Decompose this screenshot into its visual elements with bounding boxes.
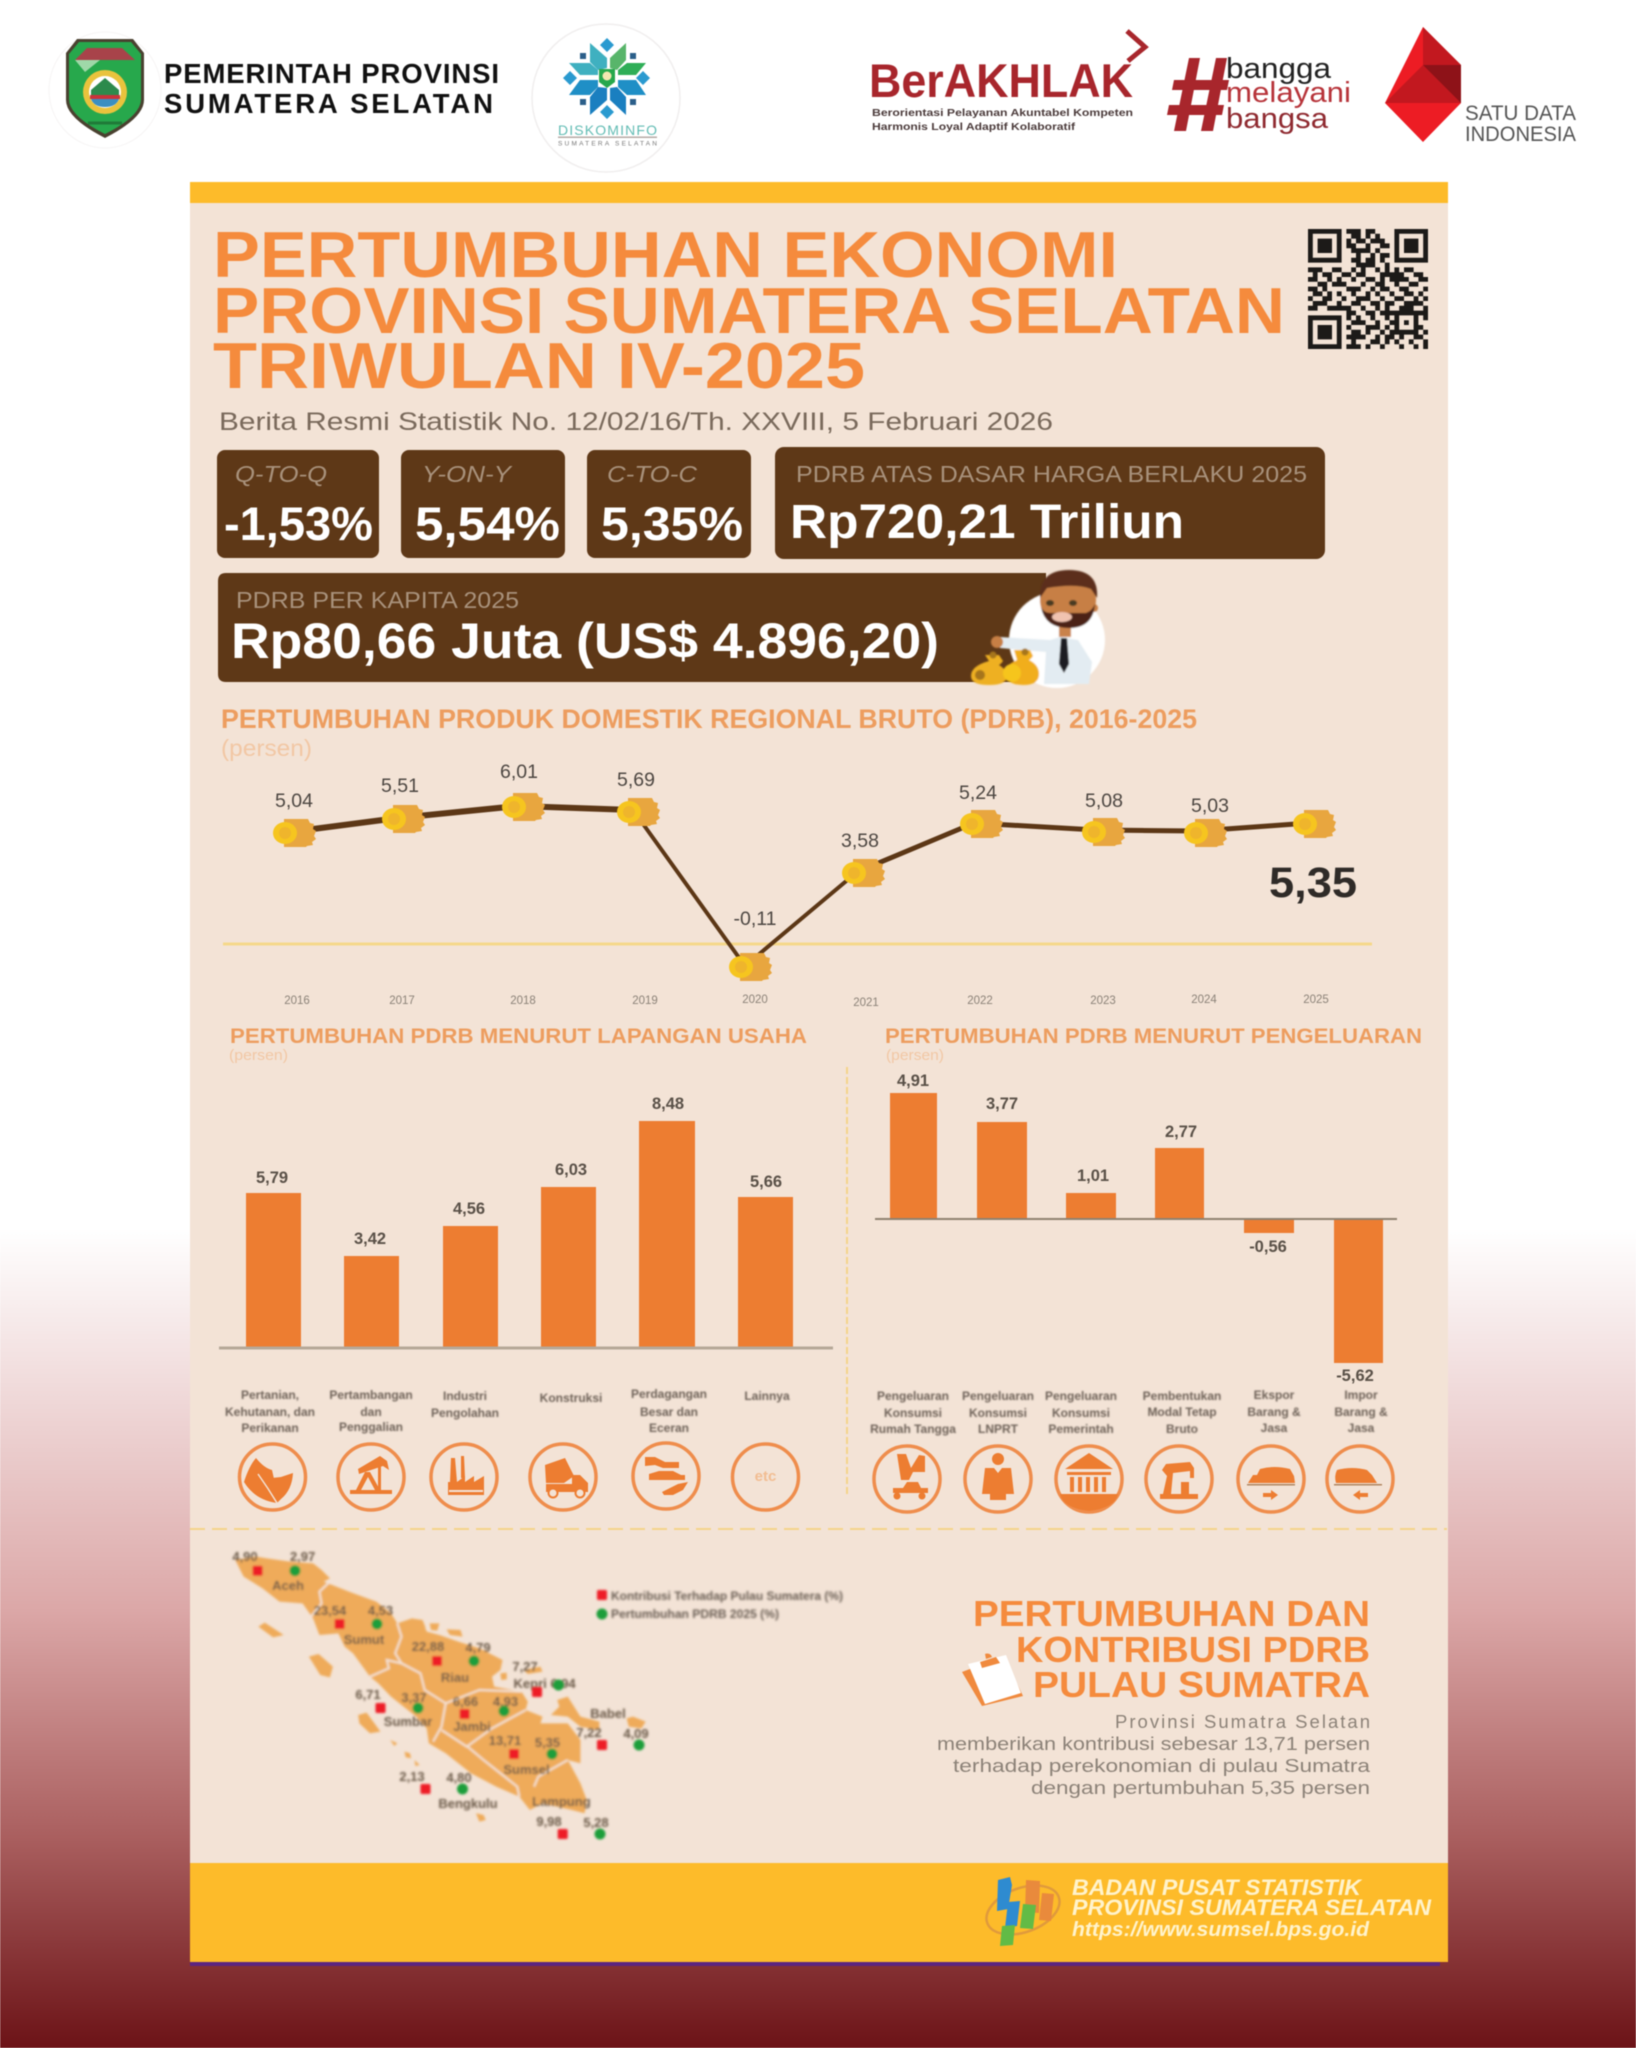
category labels: dan [360, 1405, 382, 1419]
contribution and growth values: 23,54 [314, 1603, 347, 1618]
contribution and growth values: 4,53 [368, 1603, 393, 1618]
logo: BerAKHLAK: BerAKHLAK [869, 54, 1133, 107]
bar value labels: 1,01 [1077, 1167, 1109, 1185]
contribution and growth values: 2,97 [290, 1549, 315, 1564]
bar value labels: 4,56 [453, 1200, 485, 1218]
icon: hands and car [633, 1443, 699, 1509]
logo: bangga melayani bangsa: melayani [1226, 77, 1351, 109]
category labels: Pertambangan [329, 1388, 413, 1402]
logo: Diskominfo: DISKOMINFO [558, 122, 657, 138]
bars [246, 1121, 793, 1348]
paragraph: Sumatra contribution [937, 1711, 1371, 1798]
category labels: Rumah Tangga [870, 1422, 956, 1436]
bar value labels: 2,77 [1165, 1123, 1197, 1141]
bar value labels: -0,56 [1249, 1238, 1287, 1256]
data labels: 5,04 [275, 790, 313, 812]
category labels: Konsumsi [1052, 1406, 1110, 1420]
icon: etc [732, 1444, 798, 1510]
category labels: Pengeluaran [1045, 1389, 1117, 1403]
logo: bangga melayani bangsa: bangsa [1226, 103, 1329, 135]
bar value labels: 8,48 [652, 1095, 684, 1113]
category labels: Ekspor [1254, 1388, 1295, 1402]
agency name [164, 58, 499, 119]
year axis labels: 2022 [967, 995, 993, 1007]
province names [272, 1578, 626, 1811]
year axis labels: 2021 [853, 997, 879, 1009]
stat card: C-to-C [587, 450, 751, 558]
stat card: Y-on-Y: 5,54% [415, 497, 560, 550]
legend: Pertumbuhan PDRB 2025 (%) [611, 1609, 779, 1621]
title: PROVINSI SUMATERA SELATAN [213, 274, 1285, 347]
infographic panel [190, 182, 1448, 1962]
bar value labels: 5,79 [256, 1169, 288, 1187]
contribution and growth values: 6,66 [453, 1694, 478, 1709]
stat card: Q-to-Q: -1,53% [224, 497, 373, 550]
title: TRIWULAN IV-2025 [213, 329, 865, 402]
icon: export ship [1238, 1446, 1304, 1512]
province names: Bengkulu [438, 1796, 498, 1811]
zero baseline [223, 942, 1372, 946]
horizontal divider [190, 1528, 1447, 1530]
unit label: (persen) [229, 1048, 288, 1064]
organisation text: BADAN PUSAT STATISTIK [1072, 1875, 1363, 1900]
category labels: Eceran [649, 1421, 689, 1435]
heading: Sumatra contribution: PERTUMBUHAN DAN [973, 1593, 1370, 1634]
icon: factory [431, 1444, 497, 1510]
heading: Sumatra contribution [973, 1593, 1370, 1705]
category labels: Bruto [1166, 1422, 1198, 1436]
stat card: Y-on-Y: Y-ON-Y [422, 461, 513, 487]
paragraph: Sumatra contribution: dengan pertumbuhan 5,35 persen [1031, 1777, 1370, 1798]
bar value labels: 4,91 [897, 1072, 929, 1090]
category labels: Barang & [1247, 1405, 1301, 1419]
stat card: PDRB ADHB: Rp720,21 Triliun [790, 496, 1184, 549]
stat card: PDRB ADHB: PDRB ATAS DASAR HARGA BERLAKU 2025 [796, 461, 1307, 487]
unit label: (persen) [221, 735, 312, 761]
category labels: Konsumsi [884, 1406, 942, 1420]
contribution and growth values: 4,80 [446, 1770, 472, 1785]
province names: Sumsel [503, 1762, 550, 1777]
icon: clipboard [962, 1653, 1023, 1706]
logo: Satu Data Indonesia: INDONESIA [1465, 123, 1576, 146]
stat card: C-to-C: 5,35% [601, 497, 743, 550]
bar value labels [256, 1095, 782, 1248]
year axis labels: 2020 [742, 994, 768, 1006]
year axis labels: 2016 [284, 995, 310, 1007]
category labels: Pembentukan [1143, 1389, 1221, 1403]
provinces landmass [235, 1557, 646, 1822]
bars [890, 1093, 1383, 1363]
data labels: 5,03 [1191, 795, 1229, 817]
province names: Kepri 6,94 [514, 1676, 576, 1691]
category labels [870, 1388, 1388, 1436]
paragraph: Sumatra contribution: memberikan kontribusi sebesar 13,71 persen [937, 1733, 1370, 1754]
bar value labels: 5,66 [750, 1173, 782, 1191]
data labels: 5,69 [617, 769, 655, 791]
year axis labels: 2023 [1090, 995, 1116, 1007]
data labels: 3,58 [841, 830, 879, 852]
logo: Satu Data Indonesia: SATU DATA [1465, 102, 1576, 125]
stat card: Q-to-Q: Q-TO-Q [235, 461, 327, 487]
category labels: Konsumsi [969, 1406, 1027, 1420]
section: growth by expenditure [870, 1025, 1422, 1512]
category labels: Konstruksi [540, 1391, 602, 1405]
year axis labels: 2025 [1303, 994, 1329, 1006]
icon: oil pump [338, 1444, 404, 1510]
icon: leaves [240, 1444, 306, 1510]
logo: BPS [980, 1876, 1066, 1946]
paragraph: Sumatra contribution: Provinsi Sumatra Selatan [1115, 1711, 1370, 1732]
contribution markers [253, 1566, 607, 1839]
stat card: PDRB per capita: PDRB PER KAPITA 2025 [236, 587, 519, 613]
heading: Sumatra contribution: KONTRIBUSI PDRB [1016, 1629, 1370, 1670]
logo: Pemerintah Provinsi Sumatera Selatan [49, 32, 161, 148]
category labels: Perdagangan [631, 1387, 707, 1401]
contribution and growth values: 5,35 [535, 1735, 560, 1750]
year axis labels: 2018 [510, 995, 536, 1007]
province names: Sumut [344, 1632, 385, 1647]
contribution and growth values: 3,37 [401, 1690, 427, 1705]
title [213, 218, 1285, 402]
contribution and growth values: 7,27 [512, 1659, 538, 1674]
contribution and growth values: 4,09 [623, 1726, 649, 1741]
category labels [225, 1387, 790, 1435]
category labels: Kehutanan, dan [225, 1405, 315, 1419]
unit label: (persen) [886, 1048, 944, 1064]
category labels: Perikanan [241, 1421, 299, 1435]
organisation text [1072, 1875, 1432, 1941]
province names: Jambi [453, 1719, 491, 1734]
stat card: PDRB ADHB [775, 447, 1325, 559]
paragraph: Sumatra contribution: terhadap perekonomian di pulau Sumatra [953, 1755, 1371, 1776]
icon: cement truck [530, 1444, 596, 1510]
contribution and growth values: 13,71 [489, 1733, 521, 1748]
bar value labels: 3,77 [986, 1095, 1018, 1113]
map of Sumatra [232, 1549, 843, 1840]
data labels [275, 761, 1357, 930]
subtitle: release reference: Berita Resmi Statistik No. 12/02/16/Th. XXVIII, 5 Februari 2026 [219, 408, 1053, 436]
province names: Aceh [272, 1578, 304, 1593]
QR code [1308, 229, 1428, 349]
category labels: Impor [1344, 1388, 1378, 1402]
category labels: Lainnya [744, 1389, 790, 1403]
year axis labels: 2019 [632, 995, 658, 1007]
logo: BerAKHLAK: Harmonis Loyal Adaptif Kolaboratif [872, 122, 1076, 133]
icon: person [965, 1446, 1031, 1512]
coin markers [273, 793, 1336, 981]
year axis labels: 2024 [1191, 994, 1217, 1006]
logo: BerAKHLAK [869, 31, 1145, 133]
legend: Kontribusi Terhadap Pulau Sumatera (%) [611, 1591, 843, 1603]
contribution and growth values [232, 1549, 649, 1830]
contribution and growth values: 2,13 [399, 1769, 425, 1784]
stat card: Q-to-Q [217, 450, 379, 558]
footer band [190, 1863, 1448, 1962]
category labels: Barang & [1334, 1405, 1388, 1419]
data labels: 5,51 [381, 775, 419, 797]
title: PERTUMBUHAN EKONOMI [213, 218, 1118, 291]
icon: robot arm [1146, 1446, 1212, 1512]
organisation text: https://www.sumsel.bps.go.id [1072, 1919, 1370, 1941]
header logo strip [49, 24, 1576, 172]
logo: BerAKHLAK: Berorientasi Pelayanan Akuntabel Kompeten [872, 108, 1133, 119]
province names: Riau [441, 1670, 469, 1685]
data labels: 5,08 [1085, 790, 1123, 812]
bar value labels [897, 1072, 1374, 1385]
category labels: Pertanian, [241, 1388, 299, 1402]
icon: etc: etc [755, 1468, 776, 1485]
category labels: Jasa [1348, 1421, 1375, 1435]
province names: Babel [590, 1706, 626, 1721]
logo: bangga melayani bangsa: bangga [1226, 53, 1332, 85]
axis line [219, 1346, 833, 1350]
icon: import ship [1327, 1446, 1393, 1512]
stat card: PDRB per capita: Rp80,66 Juta (US$ 4.896,20) [231, 613, 939, 669]
province names: Sumbar [384, 1714, 432, 1729]
logo: Satu Data Indonesia [1385, 27, 1576, 146]
category labels: Penggalian [339, 1420, 403, 1434]
top yellow band [190, 182, 1448, 203]
vertical divider [846, 1067, 848, 1497]
agency name: PEMERINTAH PROVINSI [164, 58, 499, 89]
data labels: -0,11 [734, 908, 776, 930]
chart heading: PERTUMBUHAN PDRB MENURUT LAPANGAN USAHA [230, 1025, 807, 1048]
agency name: SUMATERA SELATAN [164, 88, 493, 119]
logo: Diskominfo [532, 24, 680, 172]
organisation text: PROVINSI SUMATERA SELATAN [1072, 1895, 1432, 1920]
stat card: Y-on-Y [401, 450, 565, 558]
contribution and growth values: 22,88 [412, 1639, 444, 1654]
category labels: Modal Tetap [1147, 1405, 1217, 1419]
stat card: PDRB per capita [218, 573, 1046, 682]
logo: bangga melayani bangsa [1167, 53, 1351, 135]
category labels: Pemerintah [1048, 1422, 1114, 1436]
contribution and growth values: 7,22 [576, 1725, 602, 1740]
data labels: 5,24 [959, 782, 997, 804]
category labels: Besar dan [640, 1405, 698, 1419]
category labels: Industri [443, 1389, 487, 1403]
contribution and growth values: 4,79 [465, 1640, 491, 1655]
bar value labels: 6,03 [555, 1161, 587, 1179]
year axis labels: 2017 [389, 995, 415, 1007]
data labels: 5,35 [1269, 859, 1357, 907]
contribution and growth values: 4,90 [232, 1549, 258, 1564]
chart heading: PERTUMBUHAN PDRB MENURUT PENGELUARAN [885, 1025, 1422, 1048]
province names: Lampung [532, 1794, 591, 1809]
contribution and growth values: 5,28 [583, 1815, 609, 1830]
growth line [290, 806, 1309, 966]
category labels: Pengeluaran [962, 1389, 1034, 1403]
stat card: C-to-C: C-TO-C [607, 461, 697, 487]
category labels: Jasa [1261, 1421, 1288, 1435]
bar value labels: 3,42 [354, 1230, 386, 1248]
bar value labels: -5,62 [1336, 1367, 1374, 1385]
legend [596, 1590, 843, 1621]
section: PDRB growth line chart [221, 704, 1372, 1009]
contribution and growth values: 4,93 [493, 1694, 518, 1709]
category labels: Pengolahan [431, 1406, 499, 1420]
data labels: 6,01 [500, 761, 538, 783]
category labels: LNPRT [978, 1422, 1019, 1436]
contribution and growth values: 9,98 [536, 1814, 562, 1829]
category labels: Pengeluaran [877, 1389, 949, 1403]
contribution and growth values: 6,71 [355, 1687, 381, 1702]
chart heading: PERTUMBUHAN PRODUK DOMESTIK REGIONAL BRUTO (PDRB), 2016-2025 [221, 704, 1197, 734]
year axis labels [284, 994, 1329, 1009]
illustration: businessman with money bags [971, 570, 1105, 688]
purple bottom rule [190, 1962, 1440, 1966]
icon: government building [1056, 1446, 1122, 1512]
icon: groceries on scooter [874, 1446, 940, 1512]
logo: Diskominfo: SUMATERA SELATAN [558, 140, 657, 148]
axis line [875, 1218, 1397, 1220]
section: growth by industry [219, 1025, 833, 1510]
heading: Sumatra contribution: PULAU SUMATRA [1033, 1664, 1370, 1705]
growth markers [290, 1565, 644, 1840]
